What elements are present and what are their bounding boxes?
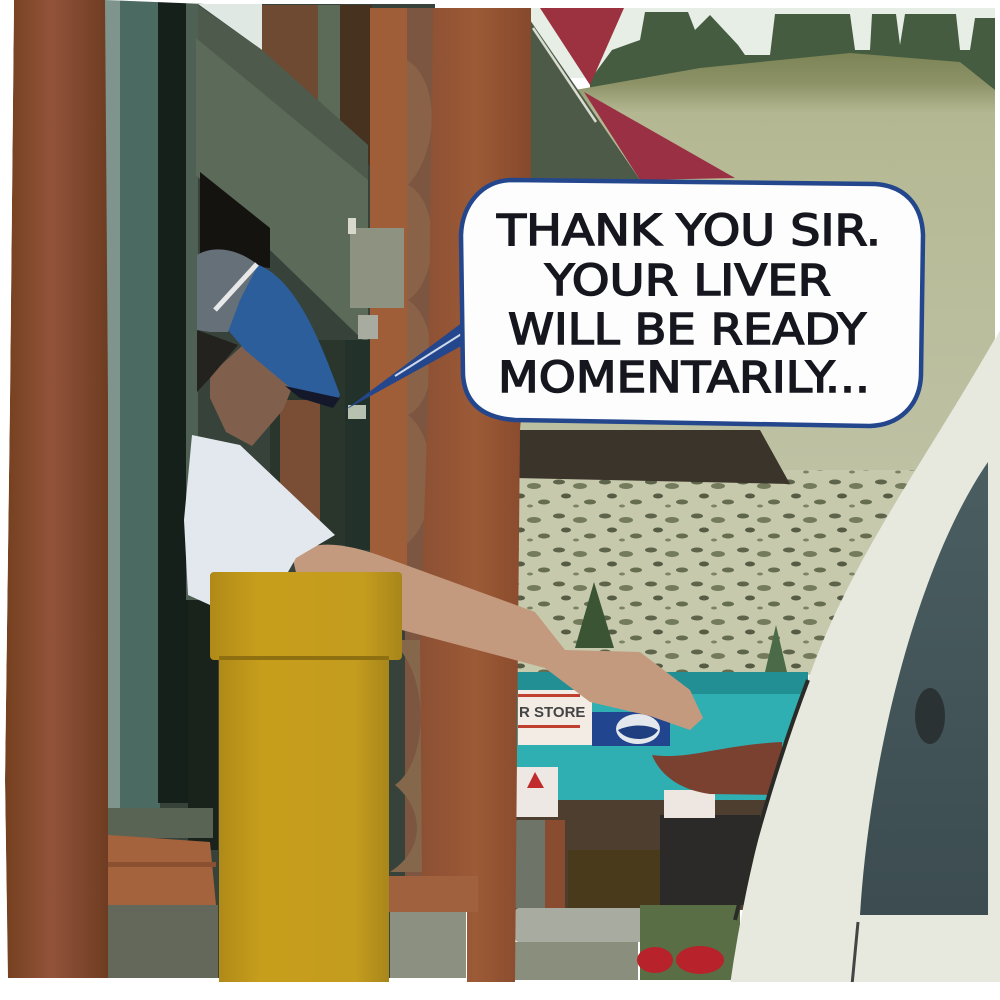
white vehicle — [730, 330, 1000, 990]
red flowers — [637, 946, 724, 974]
storefront with teal roof — [515, 672, 808, 980]
background: sky and trees — [530, 8, 995, 110]
bubble text: THANK YOU SIR. — [496, 206, 881, 256]
deck and stone base — [108, 835, 478, 978]
cap strap — [215, 264, 257, 310]
store sign — [518, 690, 592, 745]
speech bubble — [345, 180, 923, 426]
bubble text: YOUR LIVER — [544, 256, 831, 306]
main wooden column — [420, 8, 531, 982]
cap brim shadow — [285, 386, 340, 408]
worker — [184, 249, 703, 730]
red maple leaf sign — [515, 767, 558, 817]
background: hillside — [515, 53, 995, 675]
canopy under bubble — [515, 430, 790, 484]
face — [210, 345, 292, 446]
background: red roof — [530, 8, 735, 180]
bubble tail — [345, 322, 463, 410]
bubble text: MOMENTARILY... — [498, 353, 870, 403]
blue cap — [228, 262, 340, 408]
bubble text: WILL BE READY — [508, 305, 867, 355]
hand receiving — [652, 742, 782, 795]
left log column — [5, 0, 108, 978]
building wall and windows — [105, 0, 435, 978]
yellow bollard — [210, 572, 402, 982]
bubble text — [496, 206, 881, 403]
pepsi sign — [592, 712, 670, 746]
grey cap panel — [197, 249, 258, 332]
shirt — [184, 435, 335, 605]
utility box and conduit — [348, 218, 404, 419]
hair — [197, 330, 238, 392]
store sign: R STORE — [519, 704, 585, 721]
arm — [292, 545, 703, 730]
